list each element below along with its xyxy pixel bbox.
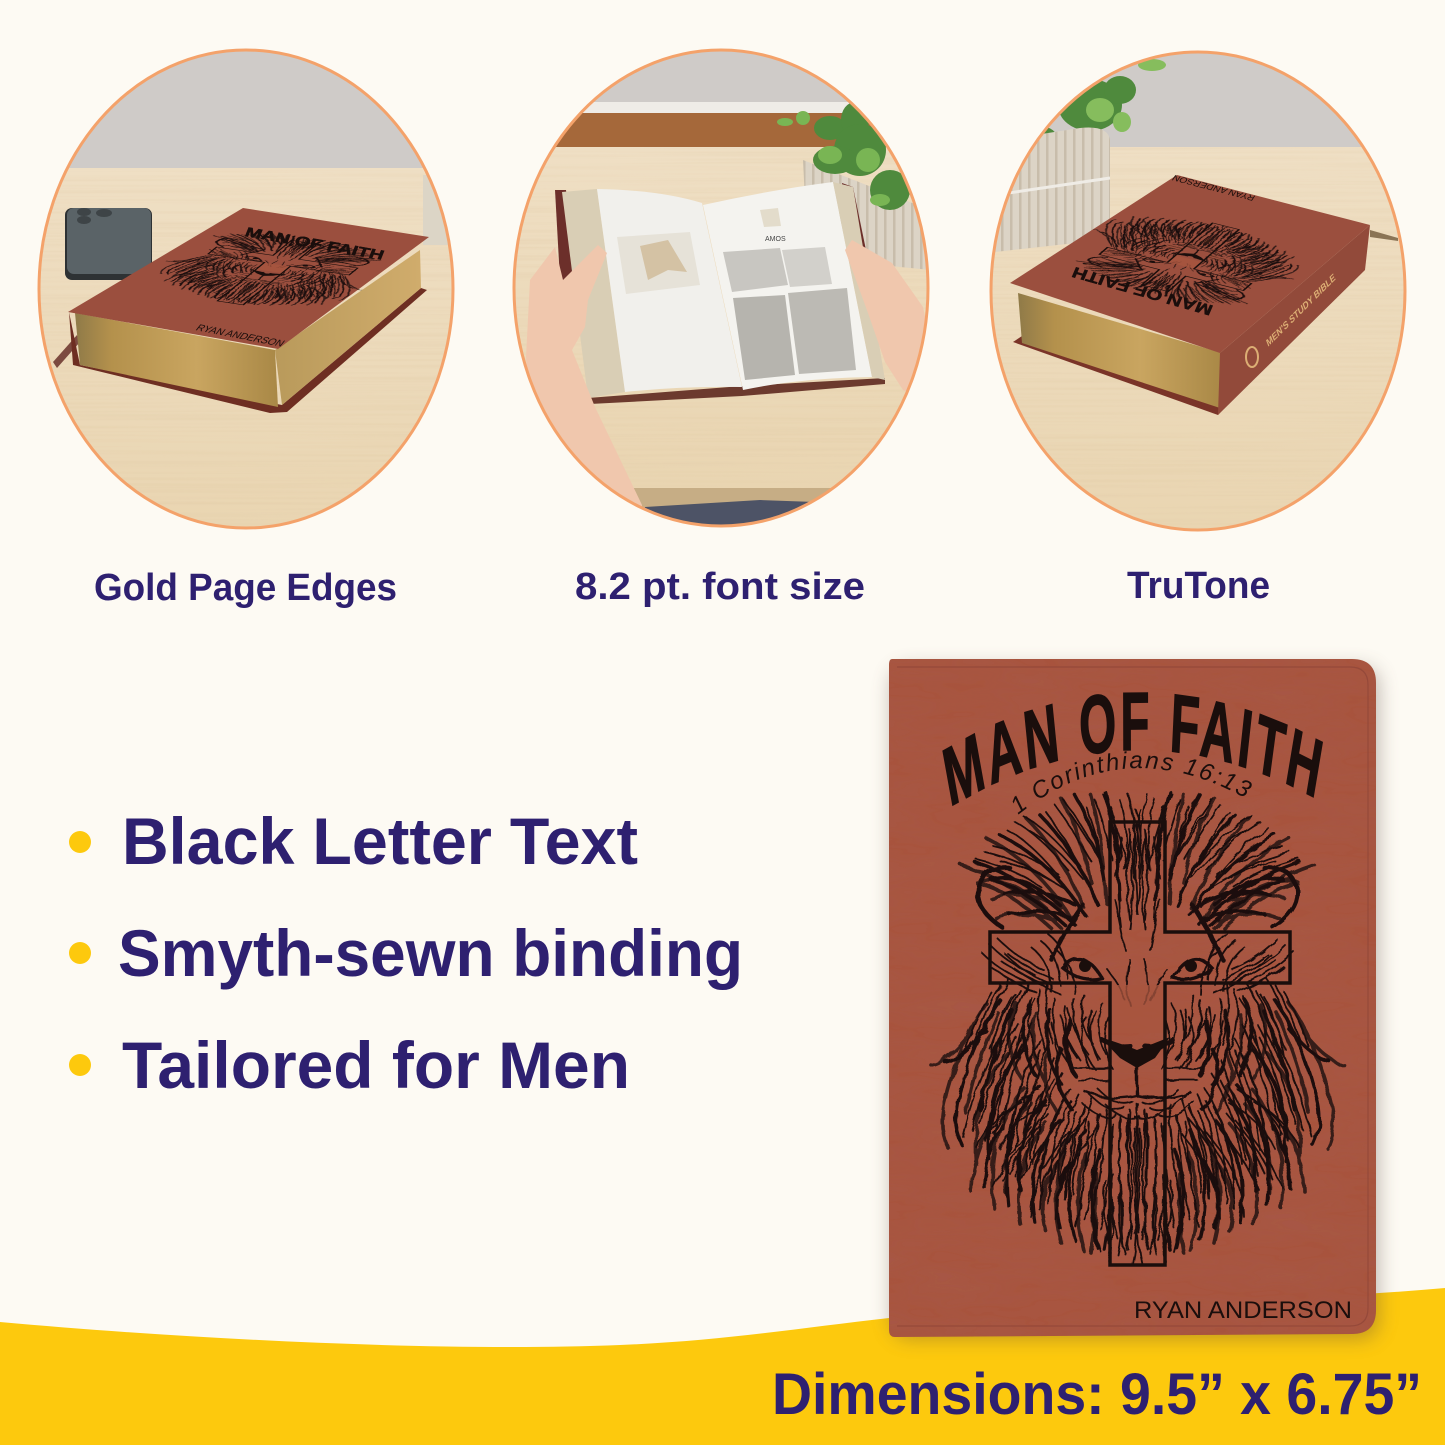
bullet: black letter text: Black Letter Text [122,804,638,878]
cover title: MAN OF FAITH [942,692,1323,806]
icon: phone [65,208,152,280]
book closed, spine: RYAN ANDERSON [1171,173,1257,201]
lion and cross engraving [931,792,1344,1265]
photo: open bible [500,40,940,540]
plant and pot [777,102,930,270]
bullet: smyth-sewn binding: Smyth-sewn binding [118,916,743,990]
bullet: tailored for men: Tailored for Men [122,1028,630,1102]
caption: trutone: TruTone [1127,565,1270,607]
book closed, spine [1010,173,1398,415]
plant and pot [990,59,1166,252]
book closed, page edges: MAN OF FAITH [243,225,386,263]
caption: font size: 8.2 pt. font size [575,566,865,608]
personalised name: RYAN ANDERSON [1134,1297,1352,1324]
cover verse: 1 Corinthians 16:13 [1012,751,1252,814]
open book [555,182,885,404]
dimensions label: Dimensions: 9.5” x 6.75” [772,1362,1422,1427]
bible front cover [880,656,1390,1349]
book closed, spine: MAN OF FAITH [1069,264,1215,319]
photo: gold page edges [30,40,460,538]
caption: gold page edges: Gold Page Edges [94,567,397,609]
open book: AMOS [765,236,786,243]
book closed, page edges [53,208,429,413]
hands [526,240,925,506]
feature list [69,804,743,1102]
footer yellow wave [0,1288,1445,1445]
book closed, spine: MEN'S STUDY BIBLE [1265,271,1337,350]
book closed, page edges: RYAN ANDERSON [193,323,286,349]
photo: trutone cover [980,40,1420,537]
